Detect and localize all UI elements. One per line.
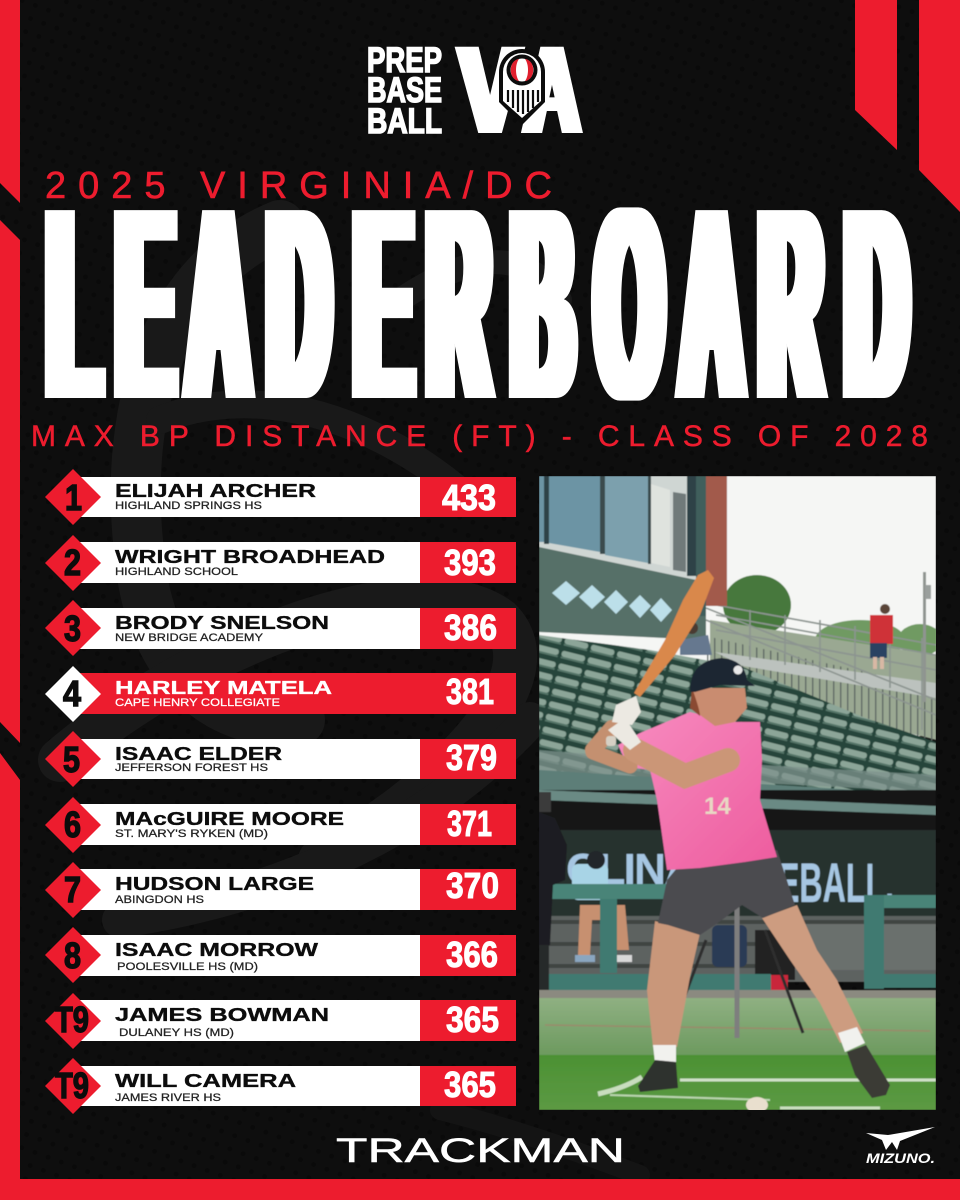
logo: Prep Baseball VA [367, 21, 580, 160]
bags [712, 924, 796, 991]
row 8 [45, 927, 516, 983]
row 6: 6 [64, 804, 81, 845]
spectator in red [870, 604, 893, 669]
red frame: bottom band [0, 1179, 960, 1200]
row 9: JAMES BOWMAN [115, 1005, 329, 1025]
building wall [539, 546, 707, 640]
tripod [681, 905, 803, 1038]
row 6: ST. MARY'S RYKEN (MD) [115, 828, 268, 840]
batter [593, 570, 890, 1098]
diamond mural [552, 581, 672, 622]
cap [690, 658, 755, 692]
walkway and fences [706, 572, 936, 744]
row 3: NEW BRIDGE ACADEMY [115, 632, 264, 644]
Mizuno wordmark: MIZUNO. [866, 1150, 935, 1166]
red frame: left lower stripe [0, 220, 20, 1180]
row 1: 433 [442, 477, 496, 518]
logo VA letters: A [524, 21, 580, 160]
logo wordmark: BALL [367, 102, 442, 141]
row 10: T9 [55, 1065, 89, 1106]
Trackman logo: TRACKMAN [336, 1132, 625, 1170]
row 10: 365 [444, 1064, 496, 1105]
row 4 highlighted: 381 [446, 671, 494, 712]
photo: batter in pink shirt at stadium [539, 476, 942, 1113]
infield grass [539, 1055, 936, 1110]
row 8: ISAAC MORROW [115, 940, 318, 960]
row 6: 371 [447, 803, 492, 844]
logo shield and ball [499, 49, 545, 125]
row 2 [45, 535, 516, 591]
row 4 highlighted: 4 [63, 673, 81, 714]
row 5: 5 [63, 739, 80, 780]
dugout dark [542, 789, 936, 830]
row 4 highlighted [45, 666, 516, 722]
teal column [696, 476, 706, 616]
row 7 [45, 862, 516, 918]
seated spectator [680, 622, 712, 655]
logo VA letters: V [459, 21, 521, 160]
stand railing [539, 750, 936, 792]
baseball [746, 1097, 768, 1113]
row 2: WRIGHT BROADHEAD [115, 547, 385, 567]
row 5: JEFFERSON FOREST HS [115, 762, 268, 774]
row 3: 3 [64, 608, 81, 649]
row 2: 393 [444, 542, 496, 583]
wall lettering [566, 852, 893, 903]
teal rails [539, 884, 936, 991]
row 1: ELIJAH ARCHER [115, 481, 316, 501]
shoes [638, 1060, 678, 1092]
row 6: MAcGUIRE MOORE [115, 809, 344, 829]
sky [539, 476, 936, 736]
row 8: POOLESVILLE HS (MD) [117, 961, 258, 973]
legs [647, 921, 700, 1047]
row 5: 379 [446, 737, 497, 778]
row 6 [45, 797, 516, 853]
row 7: 370 [446, 865, 499, 906]
row 3 [45, 600, 516, 656]
bench [539, 916, 936, 982]
dugout roof [539, 770, 854, 791]
grandstand seats [539, 635, 936, 795]
row 1 [45, 469, 516, 525]
red frame: left top stripe [0, 0, 20, 203]
jersey number: 14 [704, 793, 731, 820]
subtitle: Max BP distance: MAX BP DISTANCE (FT) - CLASS OF 2028 [31, 420, 928, 453]
shirt [618, 712, 777, 870]
outfield grass [539, 998, 936, 1055]
row 8: 366 [446, 934, 498, 975]
row 7: HUDSON LARGE [115, 874, 314, 894]
bat [634, 570, 714, 697]
icon: runbird [866, 1127, 935, 1150]
seated player [572, 851, 632, 962]
row 3: 386 [444, 607, 497, 648]
row 2: HIGHLAND SCHOOL [115, 566, 238, 578]
logo wordmark: BASE [367, 71, 442, 110]
row 2: 2 [64, 542, 81, 583]
arms [593, 728, 728, 776]
shorts [658, 850, 795, 935]
row 10: JAMES RIVER HS [115, 1092, 221, 1104]
row 9: 365 [446, 999, 499, 1040]
umpire [539, 792, 567, 993]
row 3: BRODY SNELSON [115, 613, 329, 633]
trees [723, 575, 942, 660]
row 9 [45, 993, 516, 1049]
row 7: 7 [64, 869, 81, 910]
row 1: 1 [65, 477, 82, 518]
brick column [706, 476, 727, 606]
row 10: WILL CAMERA [115, 1071, 296, 1091]
leaderboard table [45, 469, 516, 1114]
row 8: 8 [64, 935, 81, 976]
subtitle: 2025 Virginia/DC: 2025 VIRGINIA/DC [45, 165, 552, 207]
row 1: HIGHLAND SPRINGS HS [115, 500, 262, 512]
red frame: right inner stripe [855, 0, 897, 150]
dugout wall [551, 830, 936, 916]
row 4 highlighted: CAPE HENRY COLLEGIATE [115, 697, 280, 709]
socks [653, 1045, 676, 1063]
row 5 [45, 731, 516, 787]
chalk lines [598, 1077, 936, 1108]
dirt strip [539, 990, 936, 999]
logo VA letters [459, 21, 580, 160]
red frame: right outer stripe [919, 0, 960, 212]
row 9: DULANEY HS (MD) [119, 1027, 234, 1039]
logo wordmark: PREP [367, 41, 442, 80]
gloves [606, 696, 641, 750]
row 7: ABINGDON HS [115, 894, 204, 906]
Mizuno logo [866, 1127, 935, 1166]
infield dirt line [545, 1025, 930, 1031]
logo wordmark [367, 41, 442, 141]
row 9: T9 [55, 999, 89, 1040]
wall lettering: OLINA [566, 845, 696, 894]
row 10 [45, 1058, 516, 1114]
row 4 highlighted: HARLEY MATELA [115, 678, 332, 698]
row 5: ISAAC ELDER [115, 744, 282, 764]
windows [539, 476, 696, 580]
head [692, 688, 747, 726]
title: Leaderboard: LEADERBOARD [48, 151, 907, 456]
